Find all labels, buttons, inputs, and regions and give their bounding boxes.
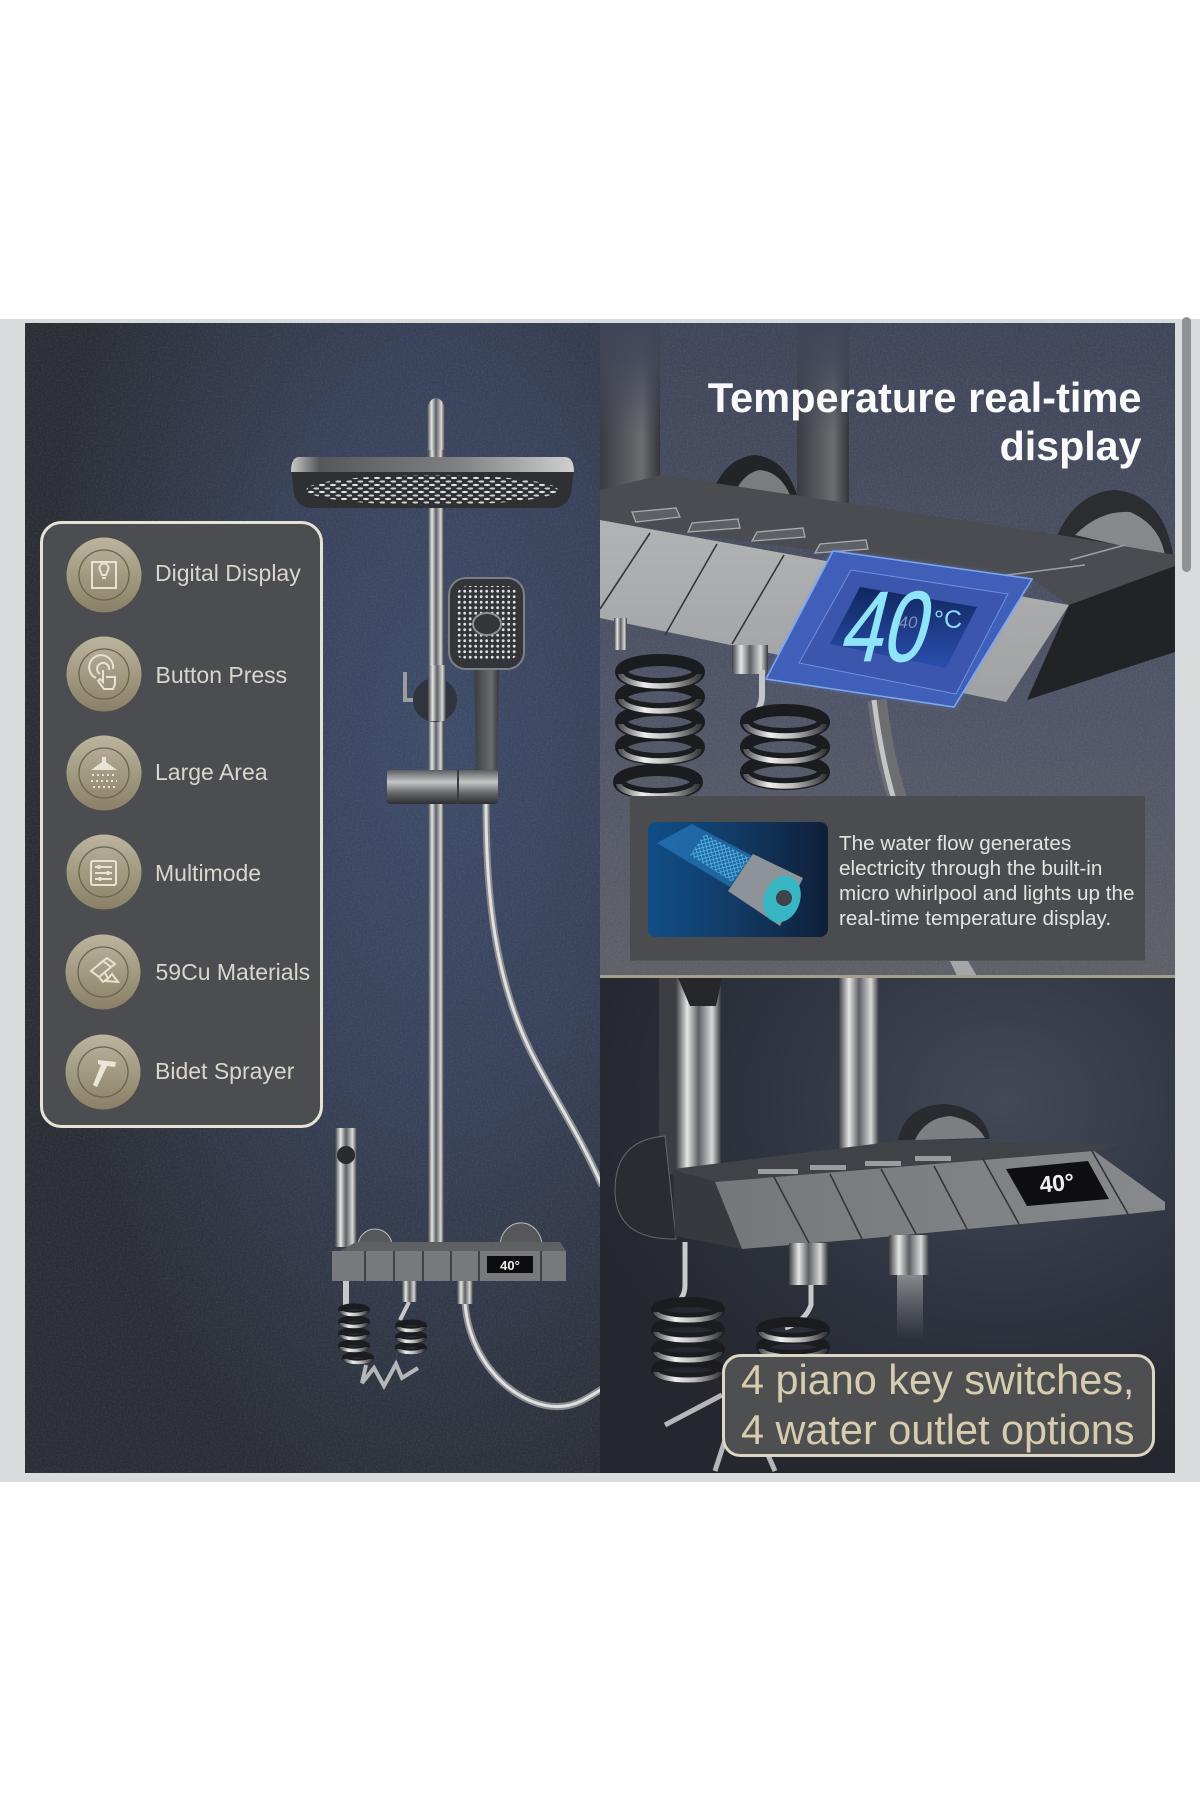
icon: sliding holder <box>387 770 498 804</box>
callout text <box>839 832 1135 930</box>
divider <box>600 975 1175 978</box>
shower riser rod <box>427 398 445 1247</box>
callout: 4 piano key switches <box>724 1356 1154 1456</box>
panel: feature list <box>42 522 322 1126</box>
callout text: The water flow generates <box>839 832 1071 855</box>
feature: Bidet Sprayer <box>66 1034 295 1110</box>
panel: temperature real-time display <box>600 323 1175 978</box>
callout: 4 piano key switches: 4 piano key switches, <box>741 1357 1134 1403</box>
feature: Large Area: Large Area <box>155 759 268 785</box>
icon: bidet sprayer holder <box>335 1128 357 1247</box>
heading <box>708 374 1142 469</box>
icon: control shelf <box>673 1141 1165 1249</box>
feature: Multimode <box>66 834 261 910</box>
icon: hand shower <box>449 578 524 775</box>
feature: Large Area <box>66 736 268 810</box>
icon: rods and domes <box>600 323 1174 560</box>
icon: spiral hoses <box>614 618 978 978</box>
scrollbar <box>1182 317 1191 572</box>
icon: wall bracket <box>405 665 457 722</box>
callout: micro whirlpool generator <box>630 796 1145 960</box>
shower hose <box>457 804 602 1407</box>
icon: control shelf with display <box>332 1223 566 1281</box>
icon: rods and brackets <box>615 978 990 1239</box>
icon: blue highlighted temperature display: 40 <box>899 613 918 632</box>
icon: blue highlighted temperature display <box>766 551 1032 707</box>
callout text: electricity through the built-in <box>839 857 1102 880</box>
heading: display <box>1000 423 1142 469</box>
feature: Button Press: Button Press <box>156 662 287 688</box>
icon: blue highlighted temperature display: °C <box>934 606 962 634</box>
feature: 59Cu Materials: 59Cu Materials <box>156 959 310 985</box>
icon: spring hoses <box>341 1281 424 1386</box>
icon: blue highlighted temperature display: 40 <box>832 572 945 683</box>
feature: 59Cu Materials <box>66 934 310 1010</box>
panel: piano key switches <box>600 978 1175 1473</box>
feature: Digital Display: Digital Display <box>155 560 301 586</box>
feature: Bidet Sprayer: Bidet Sprayer <box>155 1058 295 1084</box>
icon: shelf <box>600 475 1175 702</box>
callout text: micro whirlpool and lights up the <box>839 882 1135 905</box>
icon: control shelf: 40° <box>1038 1168 1075 1198</box>
icon: control shelf with display: 40° <box>500 1258 520 1273</box>
heading: Temperature real-time <box>708 374 1142 421</box>
feature: Multimode: Multimode <box>155 860 261 886</box>
panel: full shower system photo <box>25 323 602 1473</box>
icon: overhead rain shower head <box>291 457 574 508</box>
callout: 4 piano key switches: 4 water outlet options <box>741 1407 1134 1453</box>
screenshot frame band <box>0 319 1200 1482</box>
icon: outlet pipes and hoses <box>656 1235 929 1471</box>
feature: Button Press <box>66 636 287 712</box>
callout text: real-time temperature display. <box>839 907 1111 930</box>
feature: Digital Display <box>66 538 301 612</box>
icon: whirlpool generator thumbnail <box>648 822 828 937</box>
